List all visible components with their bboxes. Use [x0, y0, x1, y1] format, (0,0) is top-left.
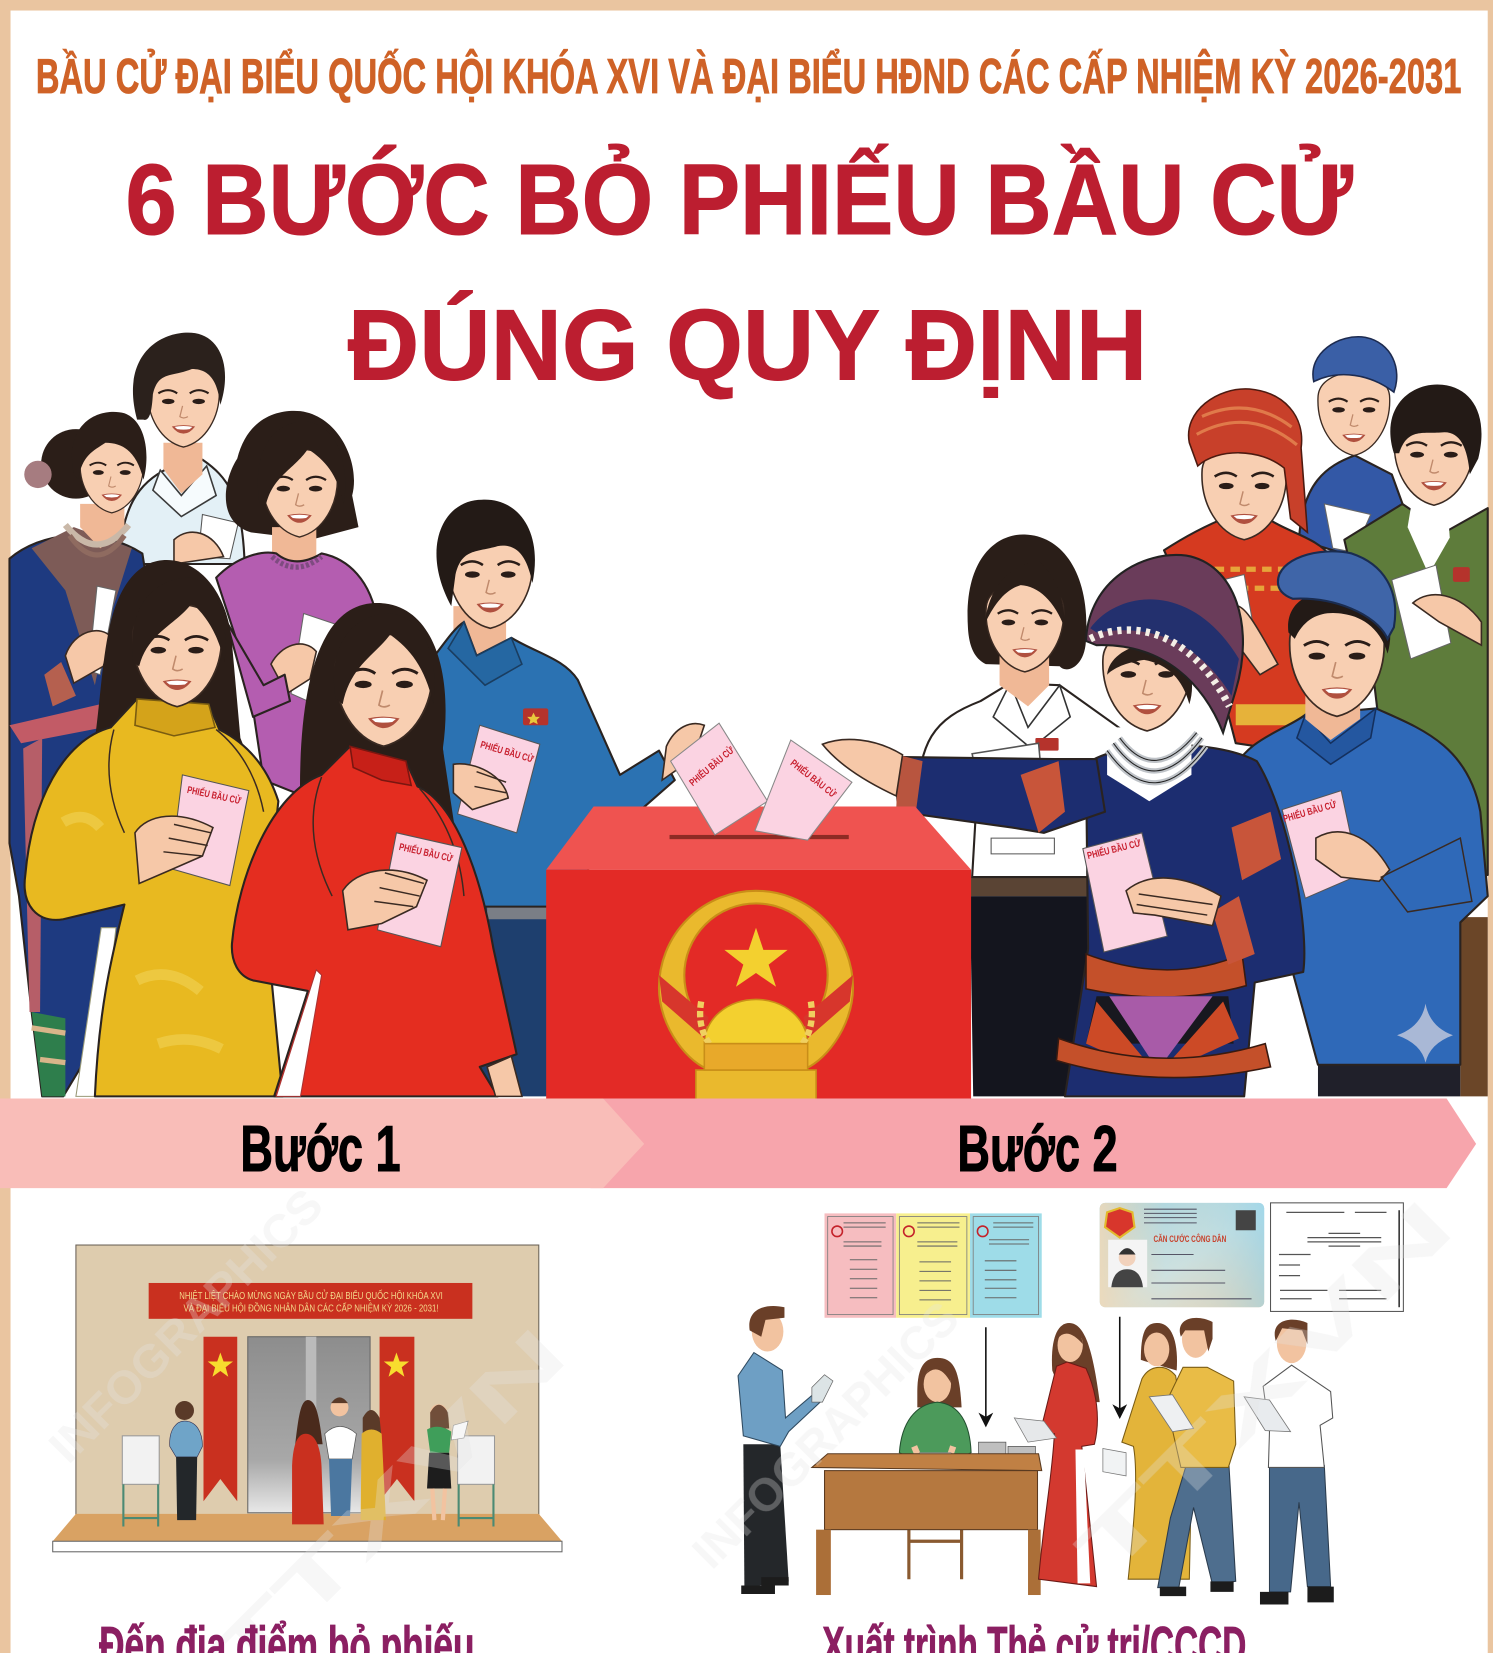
voter: woman in red ao dai: PHIẾU BẦU CỬ — [398, 840, 455, 865]
voter: man in blue shirt: PHIẾU BẦU CỬ — [479, 738, 536, 766]
notice board right — [458, 1436, 495, 1526]
flag right — [380, 1337, 414, 1501]
notice board left — [122, 1436, 159, 1526]
voter: woman with red headscarf — [1164, 389, 1341, 754]
watermarks: TTXVN — [1060, 1184, 1469, 1593]
watermarks — [39, 1178, 1469, 1653]
voter: man in blue shirt — [432, 500, 704, 1096]
national emblem — [659, 891, 853, 1100]
voter notice paper — [1271, 1203, 1403, 1311]
voter: woman in navy ethnic costume — [9, 412, 158, 1096]
ballot dropped by woman — [755, 740, 852, 840]
wall — [76, 1245, 539, 1515]
person: man at board — [170, 1401, 202, 1520]
step 1 illustration: polling station — [53, 1245, 562, 1552]
illustration: left group of voters — [9, 333, 704, 1096]
person: man in white shirt — [325, 1397, 356, 1516]
arrow to ballots — [978, 1327, 993, 1427]
citizen ID card: CĂN CƯỚC CÔNG DÂN — [1153, 1233, 1226, 1245]
voter: man in blue with blue cap front: PHIẾU BẦU CỬ — [1281, 797, 1338, 825]
person: seated official in green — [899, 1358, 971, 1463]
illustration: right group of voters — [822, 337, 1488, 1096]
desk — [812, 1454, 1042, 1595]
step 1 label: Bước 1 — [240, 1112, 401, 1185]
voter: man in white shirt — [118, 333, 245, 564]
main title: ĐÚNG QUY ĐỊNH — [348, 290, 1147, 402]
voter: woman in white shirt — [917, 534, 1126, 1096]
floor — [53, 1514, 562, 1552]
step 1 ribbon — [0, 1098, 644, 1188]
sparkle mark — [1397, 1004, 1453, 1063]
citizen ID card — [1100, 1203, 1264, 1307]
person: woman in red ao dai — [1014, 1323, 1100, 1587]
banner: VÀ ĐẠI BIỂU HỘI ĐỒNG NHÂN DÂN CÁC CẤP NHIỆM KỲ 2026 - 2031! — [183, 1301, 439, 1314]
voter: man in blue with blue cap front — [1234, 551, 1488, 1096]
ballot dropped by man: PHIẾU BẦU CỬ — [686, 743, 737, 789]
voting papers on desk — [978, 1442, 1035, 1462]
person: man in blue shirt — [738, 1306, 833, 1594]
person: man in yellow shirt — [1149, 1318, 1236, 1596]
sample ballots — [825, 1213, 1042, 1318]
flag left — [203, 1337, 237, 1501]
box front — [546, 870, 971, 1107]
ballot dropped by man — [671, 723, 768, 835]
banner: NHIỆT LIỆT CHÀO MỪNG NGÀY BẦU CỬ ĐẠI BIỂU QUỐC HỘI KHÓA XVI — [179, 1288, 443, 1302]
arrow to ID card — [1112, 1317, 1127, 1419]
person: woman in green top — [427, 1404, 468, 1520]
person: man in white shirt with paper — [1244, 1320, 1334, 1605]
ballot box — [546, 806, 971, 1107]
box slot — [670, 835, 849, 839]
step 2 label: Bước 2 — [957, 1112, 1118, 1185]
voter: woman in ethnic costume reaching to ballot box: PHIẾU BẦU CỬ — [1086, 836, 1143, 862]
person: woman in red from behind — [292, 1400, 324, 1524]
door — [248, 1337, 370, 1513]
ballot dropped by woman: PHIẾU BẦU CỬ — [788, 756, 839, 801]
voter: woman in yellow ao dai: PHIẾU BẦU CỬ — [186, 783, 243, 807]
voter: man in green uniform — [1344, 385, 1488, 875]
box lid — [546, 806, 971, 870]
step 2 ribbon — [590, 1098, 1476, 1188]
banner — [149, 1283, 472, 1319]
voter: man with blue cap at back — [1299, 337, 1413, 559]
main title — [125, 144, 1354, 402]
voter: woman in yellow ao dai — [25, 560, 283, 1096]
person: woman in yellow ao dai — [1103, 1323, 1191, 1579]
watermarks: INFOGRAPHICS — [682, 1291, 969, 1578]
step 2 illustration: voters presenting documents — [738, 1203, 1403, 1605]
voter: woman in purple dress — [216, 411, 377, 801]
voter: woman in red ao dai — [232, 603, 522, 1096]
main title: 6 BƯỚC BỎ PHIẾU BẦU CỬ — [125, 144, 1354, 256]
voter: woman in ethnic costume reaching to ballot box — [822, 555, 1304, 1096]
watermarks: INFOGRAPHICS — [39, 1178, 333, 1472]
person: woman in yellow ao dai — [361, 1410, 386, 1520]
